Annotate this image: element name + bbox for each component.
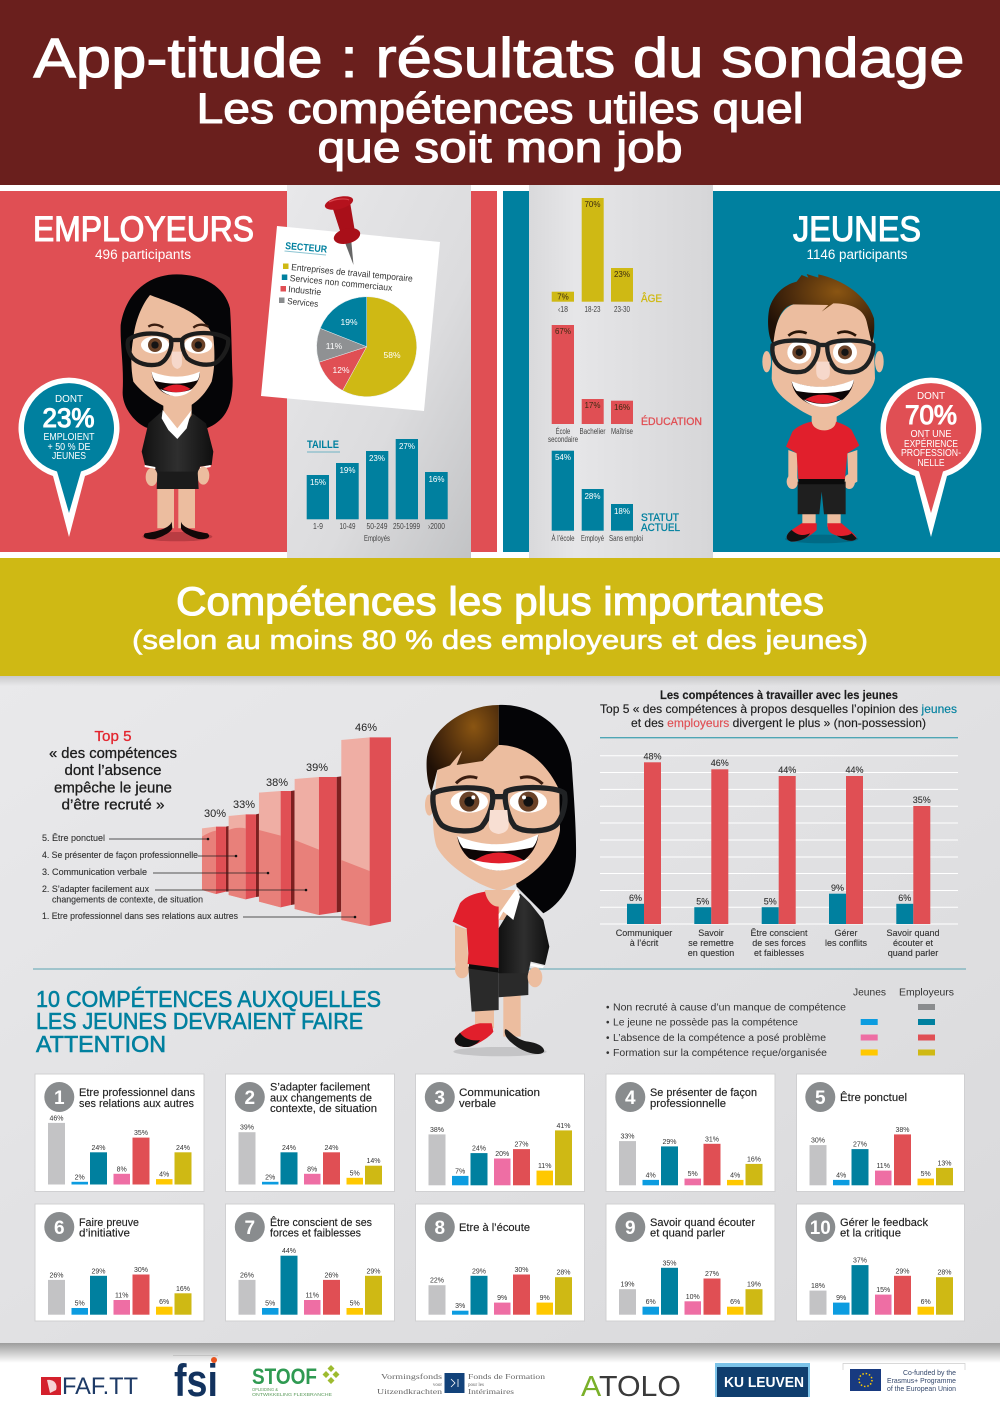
bar chart: taille: 10-49 bbox=[340, 521, 356, 531]
list: top 5 labels: 5. Être ponctuel bbox=[42, 833, 105, 843]
card 10: 29% bbox=[895, 1268, 910, 1275]
card 9: 19% bbox=[620, 1282, 635, 1289]
logo: fonds de formation: pour les bbox=[468, 1383, 484, 1388]
card 7: 29% bbox=[366, 1268, 381, 1275]
card 8: Etre à l’écoute bbox=[459, 1222, 530, 1234]
logo: Erasmus+ bbox=[843, 1364, 965, 1393]
card 8: 22% bbox=[430, 1278, 444, 1285]
bar chart: statut actuel: 18% bbox=[614, 507, 630, 516]
title banner: App-titude : résultats du sondage bbox=[34, 26, 964, 89]
bar chart: divergence jeunes employeurs: Savoir quand bbox=[886, 928, 940, 938]
callout: 23% bbox=[18, 378, 120, 537]
logo: Erasmus+: Erasmus+ Programme bbox=[887, 1376, 956, 1385]
card 6: 16% bbox=[176, 1286, 190, 1293]
logo: fonds de formation: Uitzendkrachten bbox=[377, 1387, 442, 1396]
callout: 70% bbox=[880, 378, 981, 537]
card 1: 46% bbox=[49, 1116, 64, 1122]
logo: STOOF bbox=[252, 1364, 340, 1397]
pie legend: Services non commerciaux bbox=[289, 273, 393, 293]
card 7: 11% bbox=[305, 1292, 319, 1299]
card 2: 2 bbox=[245, 1088, 255, 1109]
list: top 5 labels: 3. Communication verbale bbox=[42, 867, 147, 877]
title banner bbox=[0, 0, 1000, 185]
card 6: d’initiative bbox=[79, 1228, 130, 1240]
card 10: et la critique bbox=[840, 1228, 901, 1240]
logo: STOOF: STOOF bbox=[252, 1364, 317, 1389]
bar chart: éducation: 16% bbox=[614, 403, 630, 412]
logo: STOOF: OPLEIDING & bbox=[252, 1387, 278, 1392]
card 5: 38% bbox=[895, 1127, 910, 1134]
pie chart: 11% bbox=[326, 341, 343, 351]
bar chart: âge: 7% bbox=[557, 292, 569, 302]
bar chart: taille: ›2000 bbox=[428, 521, 445, 531]
bar chart: divergence jeunes employeurs: 46% bbox=[711, 758, 729, 768]
bar chart: âge: 23-30 bbox=[614, 304, 630, 314]
card 10: 37% bbox=[853, 1258, 867, 1265]
main grey background bbox=[0, 676, 1000, 1343]
text block: top 5: dont l’absence bbox=[64, 762, 162, 779]
bar chart: divergence jeunes employeurs: à l’écrit bbox=[630, 938, 659, 948]
logo: fsi: fsi bbox=[174, 1355, 218, 1406]
card 1: 35% bbox=[134, 1130, 148, 1137]
card 4: 5% bbox=[688, 1171, 698, 1178]
card 9: 6% bbox=[646, 1299, 656, 1306]
bar chart: divergence jeunes employeurs: 6% bbox=[898, 893, 911, 903]
bar chart: divergence jeunes employeurs: Gérer bbox=[834, 928, 858, 938]
card 8: 30% bbox=[514, 1267, 529, 1274]
list: top 5 labels bbox=[42, 833, 356, 921]
card 4: Se présenter de façon bbox=[650, 1087, 757, 1099]
card 9: 19% bbox=[747, 1282, 761, 1289]
card 4: 33% bbox=[620, 1134, 635, 1141]
chart title: divergence bbox=[600, 688, 957, 730]
pie legend: Entreprises de travail temporaire bbox=[291, 262, 413, 284]
bar chart: éducation: École bbox=[556, 426, 570, 436]
card 8: 28% bbox=[556, 1270, 571, 1277]
bar chart: statut actuel: 28% bbox=[584, 492, 601, 501]
bar chart: taille: 16% bbox=[428, 475, 445, 484]
bar chart: statut actuel: À l’école bbox=[552, 533, 575, 543]
3D bar chart: top 5 bbox=[42, 722, 391, 926]
yellow band heading: Compétences les plus importantes bbox=[176, 580, 824, 624]
card 2: 24% bbox=[282, 1145, 296, 1152]
pie legend: Services bbox=[287, 296, 319, 309]
card 10: 18% bbox=[811, 1283, 825, 1290]
card 2: 8% bbox=[307, 1166, 317, 1174]
card 10: 28% bbox=[937, 1270, 952, 1277]
card 10: 15% bbox=[876, 1287, 890, 1294]
bar chart: âge: ÂGE bbox=[641, 292, 662, 305]
card 4 bbox=[606, 1074, 775, 1192]
card 7: 44% bbox=[282, 1248, 296, 1255]
participants employeurs: 496 participants bbox=[95, 247, 191, 262]
card 9: Savoir quand écouter bbox=[650, 1217, 755, 1229]
legend: • bbox=[606, 1018, 610, 1028]
card 3 bbox=[416, 1074, 584, 1192]
bar chart: taille: 15% bbox=[310, 478, 326, 487]
text block: top 5 bbox=[49, 728, 177, 814]
bar chart: divergence jeunes employeurs: quand parler bbox=[888, 948, 938, 958]
legend bbox=[606, 988, 954, 1059]
bar chart: statut actuel: STATUT bbox=[641, 512, 679, 524]
logo: Erasmus+: Co-funded by the bbox=[903, 1368, 956, 1377]
bar chart: statut actuel: Employé bbox=[581, 533, 604, 543]
callout: 70%: ONT UNE bbox=[910, 429, 952, 440]
card 5: 30% bbox=[811, 1138, 825, 1145]
card 5: 11% bbox=[876, 1163, 890, 1170]
legend: Non recruté à cause d’un manque de compétence bbox=[613, 1002, 846, 1014]
card 8: 3% bbox=[455, 1303, 465, 1310]
card 1: 8% bbox=[117, 1166, 127, 1174]
logo: fonds de formation: Vormingsfonds bbox=[381, 1372, 442, 1381]
panel: jeunes bbox=[713, 191, 1000, 552]
bar chart: âge: 70% bbox=[584, 200, 601, 209]
card 2: contexte, de situation bbox=[270, 1103, 377, 1115]
card 3: 3 bbox=[435, 1088, 445, 1109]
legend: Employeurs bbox=[899, 988, 954, 998]
panel: employeurs bbox=[0, 191, 287, 552]
text block: top 5: « des compétences bbox=[49, 745, 177, 762]
text block: top 5: d’être recruté » bbox=[62, 796, 164, 814]
card 5: 13% bbox=[937, 1160, 952, 1167]
card 4: 29% bbox=[662, 1139, 677, 1146]
3D bar chart: top 5: 33% bbox=[233, 799, 255, 811]
card 9: 27% bbox=[705, 1271, 719, 1278]
bar chart: divergence jeunes employeurs: écouter et bbox=[893, 938, 934, 948]
legend: Formation sur la compétence reçue/organisée bbox=[613, 1048, 827, 1059]
text block: top 5: empêche le jeune bbox=[54, 780, 172, 796]
card 4: 4 bbox=[625, 1088, 636, 1109]
pie chart: 58% bbox=[383, 350, 401, 360]
bar chart: divergence jeunes employeurs: 5% bbox=[696, 896, 709, 906]
legend: Jeunes bbox=[853, 988, 886, 998]
bar chart: divergence jeunes employeurs: 9% bbox=[831, 883, 844, 893]
callout: 23%: DONT bbox=[55, 393, 84, 405]
callout: 70%: 70% bbox=[905, 400, 957, 430]
bar chart: âge bbox=[552, 198, 662, 314]
bar chart: taille: 250-1999 bbox=[393, 521, 420, 531]
icon: red pushpin bbox=[323, 194, 362, 265]
taille heading: TAILLE bbox=[307, 439, 339, 451]
card 1: ses relations aux autres bbox=[79, 1098, 194, 1110]
callout: 70%: DONT bbox=[917, 390, 946, 402]
3D bar chart: top 5: 46% bbox=[355, 722, 377, 734]
card 3: 20% bbox=[495, 1151, 509, 1158]
note: secteur bbox=[261, 226, 440, 411]
card 2: 39% bbox=[240, 1125, 254, 1132]
card 7: forces et faiblesses bbox=[270, 1228, 361, 1240]
card 6: 6% bbox=[159, 1299, 169, 1306]
bar chart: divergence jeunes employeurs: les conflits bbox=[825, 938, 868, 948]
card 7: 26% bbox=[324, 1272, 339, 1279]
card 6: 30% bbox=[134, 1267, 148, 1274]
bar chart: taille: Employés bbox=[364, 533, 390, 543]
pie legend: Industrie bbox=[288, 284, 322, 297]
bar chart: divergence jeunes employeurs: et faiblesses bbox=[754, 948, 805, 958]
card 3: verbale bbox=[459, 1098, 496, 1110]
bar chart: divergence jeunes employeurs: 6% bbox=[629, 893, 642, 903]
bar chart: taille bbox=[307, 439, 448, 543]
card 3: Communication bbox=[459, 1087, 540, 1099]
card 7: 7 bbox=[245, 1218, 255, 1239]
bar chart: éducation: Bachelier bbox=[580, 426, 606, 436]
card 4: 31% bbox=[705, 1136, 719, 1143]
logo: fonds de formation: Intérimaires bbox=[468, 1387, 514, 1396]
heading: jeunes: JEUNES bbox=[793, 210, 921, 249]
character: employer woman bbox=[121, 274, 233, 541]
bar chart: divergence jeunes employeurs: 48% bbox=[643, 752, 662, 762]
bar chart: éducation: Maîtrise bbox=[611, 426, 633, 436]
bar chart: divergence jeunes employeurs: 44% bbox=[845, 765, 864, 775]
participants jeunes: 1146 participants bbox=[806, 247, 908, 262]
card 3: 7% bbox=[455, 1168, 465, 1175]
card 6: 26% bbox=[49, 1272, 64, 1279]
card 1: 24% bbox=[176, 1145, 190, 1152]
callout: 70%: EXPÉRIENCE bbox=[904, 437, 958, 450]
card 9: 6% bbox=[730, 1299, 740, 1306]
card 3: 41% bbox=[556, 1123, 571, 1130]
bar chart: éducation: 67% bbox=[555, 327, 571, 336]
bar chart: taille: 1-9 bbox=[313, 521, 323, 531]
card 1: 24% bbox=[91, 1145, 106, 1152]
bar chart: âge: 23% bbox=[614, 270, 630, 279]
bar chart: éducation: ÉDUCATION bbox=[641, 415, 702, 428]
card 7: 26% bbox=[240, 1272, 254, 1279]
card 5: 27% bbox=[853, 1142, 867, 1149]
card 6: 11% bbox=[115, 1292, 128, 1299]
card 8: 29% bbox=[472, 1268, 486, 1275]
list: top 5 labels: changements de contexte, de situation bbox=[52, 894, 203, 904]
title banner: que soit mon job bbox=[318, 124, 682, 172]
card 1 bbox=[35, 1074, 204, 1192]
card 6: Faire preuve bbox=[79, 1217, 139, 1229]
text block: top 5: Top 5 bbox=[94, 728, 132, 745]
title banner: Les compétences utiles quel bbox=[196, 85, 804, 133]
bar chart: divergence jeunes employeurs bbox=[600, 738, 958, 958]
list: top 5 labels: 2. S’adapter facilement aux bbox=[42, 884, 149, 894]
card 1: 1 bbox=[54, 1088, 65, 1109]
pie chart bbox=[317, 297, 417, 397]
callout: 23%: + 50 % DE bbox=[48, 442, 91, 453]
card 3: 27% bbox=[514, 1142, 529, 1149]
bar chart: âge: ‹18 bbox=[558, 304, 568, 314]
card 9: 35% bbox=[662, 1260, 677, 1267]
card 3: 24% bbox=[472, 1146, 486, 1153]
pie chart: 19% bbox=[340, 317, 358, 327]
card 9: 10% bbox=[686, 1294, 700, 1301]
bar chart: éducation: secondaire bbox=[548, 434, 578, 444]
bar chart: statut actuel: 54% bbox=[555, 453, 571, 462]
card 4: 16% bbox=[747, 1156, 761, 1163]
card 10: 6% bbox=[921, 1299, 931, 1306]
card 3: 38% bbox=[430, 1127, 444, 1134]
logo: STOOF: ONTWIKKELING FLEXBRANCHE bbox=[252, 1392, 332, 1397]
character: half young man half employer bbox=[425, 705, 576, 1056]
card 5: Être ponctuel bbox=[840, 1091, 907, 1104]
bar chart: taille: 19% bbox=[339, 466, 356, 475]
card 2: 14% bbox=[366, 1158, 381, 1165]
card 6: 5% bbox=[75, 1300, 85, 1307]
card 9 bbox=[606, 1204, 775, 1321]
bar chart: éducation bbox=[548, 325, 702, 444]
card 2: 24% bbox=[324, 1145, 339, 1152]
card 6 bbox=[35, 1204, 204, 1321]
callout: 70%: NELLE bbox=[918, 458, 945, 469]
bar chart: âge: 18-23 bbox=[584, 304, 601, 314]
legend: • bbox=[606, 1002, 610, 1014]
bar chart: divergence jeunes employeurs: en question bbox=[688, 948, 734, 958]
card 4: 4% bbox=[646, 1172, 656, 1179]
heading: employeurs: EMPLOYEURS bbox=[33, 210, 254, 249]
card 6: 6 bbox=[54, 1218, 65, 1239]
card 5 bbox=[796, 1074, 964, 1192]
pie chart: 12% bbox=[332, 365, 350, 375]
footer: partner logos bbox=[0, 1343, 1000, 1424]
yellow band heading bbox=[0, 558, 1000, 676]
card 2: S’adapter facilement bbox=[270, 1082, 370, 1094]
chart title: divergence: Top 5 « des compétences à propos desquelles l’opinion des jeunes bbox=[600, 702, 957, 716]
panel: profil des jeunes bbox=[503, 185, 713, 558]
logo: KU Leuven: KU LEUVEN bbox=[724, 1375, 804, 1391]
bar chart: divergence jeunes employeurs: Être conscient bbox=[750, 928, 808, 938]
bar chart: taille: 23% bbox=[369, 454, 385, 463]
card 8: 8 bbox=[435, 1218, 445, 1239]
bar chart: taille: 27% bbox=[399, 442, 415, 451]
heading: 10 compétences: ATTENTION bbox=[36, 1031, 166, 1057]
bar chart: divergence jeunes employeurs: 5% bbox=[764, 896, 777, 906]
3D bar chart: top 5: 30% bbox=[204, 808, 226, 820]
pie legend bbox=[279, 262, 413, 309]
card 2: 2% bbox=[265, 1174, 275, 1182]
character: young man bbox=[762, 274, 884, 543]
bar chart: statut actuel: Sans emploi bbox=[609, 533, 643, 543]
list: top 5 labels: 4. Se présenter de façon professionnelle bbox=[42, 850, 198, 860]
card 8: 9% bbox=[497, 1295, 507, 1302]
list: top 5 labels: 1. Etre professionnel dans ses relations aux autres bbox=[42, 911, 238, 921]
card 7: Être conscient de ses bbox=[270, 1216, 372, 1229]
card 5: 4% bbox=[836, 1172, 846, 1179]
bar chart: éducation: 17% bbox=[584, 401, 601, 410]
chart title: divergence: Les compétences à travailler avec les jeunes bbox=[660, 688, 898, 702]
card 6: 29% bbox=[91, 1268, 106, 1275]
bar chart: divergence jeunes employeurs: Savoir bbox=[698, 928, 724, 938]
bar chart: divergence jeunes employeurs: de ses forces bbox=[752, 938, 806, 948]
chart title: divergence: et des employeurs divergent le plus » (non-possession) bbox=[631, 716, 926, 730]
bar chart: divergence jeunes employeurs: Communiquer bbox=[616, 928, 672, 938]
card 10: 9% bbox=[836, 1295, 846, 1302]
bar chart: divergence jeunes employeurs: 44% bbox=[778, 765, 796, 775]
callout: 23%: EMPLOIENT bbox=[44, 432, 94, 443]
bar chart: statut actuel: ACTUEL bbox=[641, 522, 680, 534]
heading: 10 compétences: 10 COMPÉTENCES AUXQUELLES bbox=[36, 986, 381, 1012]
card 9: et quand parler bbox=[650, 1228, 725, 1240]
logo: FAF.TT: FAF.TT bbox=[62, 1373, 138, 1400]
legend: L’absence de la compétence a posé problème bbox=[613, 1033, 826, 1044]
bar chart: taille: 50-249 bbox=[366, 521, 388, 531]
card 2: 5% bbox=[350, 1170, 360, 1178]
card 4: 4% bbox=[730, 1172, 740, 1179]
card 7: 5% bbox=[350, 1300, 360, 1307]
3D bar chart: top 5: 39% bbox=[306, 762, 328, 774]
logo: fonds de formation bbox=[377, 1372, 545, 1396]
callout: 23%: JEUNES bbox=[52, 451, 86, 462]
logo: fonds de formation: voor bbox=[433, 1383, 442, 1388]
yellow band heading: (selon au moins 80 % des employeurs et des jeunes) bbox=[132, 625, 868, 655]
legend: • bbox=[606, 1048, 610, 1059]
card 8: 9% bbox=[540, 1295, 550, 1302]
card 1: 2% bbox=[75, 1174, 85, 1182]
card 1: Etre professionnel dans bbox=[79, 1087, 195, 1099]
card 4: professionnelle bbox=[650, 1098, 726, 1110]
card 9: 9 bbox=[625, 1218, 636, 1239]
card 7: 5% bbox=[265, 1300, 275, 1307]
logo: fonds de formation: Fonds de Formation bbox=[468, 1372, 545, 1381]
card 5: 5% bbox=[921, 1171, 931, 1178]
callout: 70%: PROFESSION- bbox=[901, 448, 961, 459]
card 5: 5 bbox=[815, 1088, 826, 1109]
legend: • bbox=[606, 1033, 610, 1044]
3D bar chart: top 5: 38% bbox=[266, 777, 288, 789]
card 10: Gérer le feedback bbox=[840, 1217, 929, 1229]
card 1: 4% bbox=[159, 1172, 169, 1178]
card 8 bbox=[416, 1204, 584, 1321]
logo: KU Leuven bbox=[715, 1363, 810, 1397]
card 10 bbox=[796, 1204, 964, 1321]
bar chart: divergence jeunes employeurs: 35% bbox=[913, 795, 931, 805]
legend: Le jeune ne possède pas la compétence bbox=[613, 1018, 798, 1028]
callout: 23%: 23% bbox=[42, 403, 94, 433]
card 3: 11% bbox=[538, 1163, 551, 1170]
panel: secteur et taille bbox=[261, 185, 497, 558]
bar chart: divergence jeunes employeurs: se remettre bbox=[688, 938, 734, 948]
bar chart: statut actuel bbox=[552, 451, 680, 543]
heading: 10 compétences: LES JEUNES DEVRAIENT FAIRE bbox=[36, 1008, 363, 1034]
card 10: 10 bbox=[810, 1218, 831, 1239]
card 2 bbox=[226, 1074, 394, 1192]
logo: Erasmus+: of the European Union bbox=[887, 1384, 956, 1393]
logo: ATOLO: ATOLO bbox=[581, 1371, 681, 1403]
card 2: aux changements de bbox=[270, 1092, 372, 1104]
heading: 10 compétences bbox=[36, 986, 381, 1057]
card 7 bbox=[226, 1204, 394, 1321]
secteur heading: SECTEUR bbox=[285, 241, 328, 256]
